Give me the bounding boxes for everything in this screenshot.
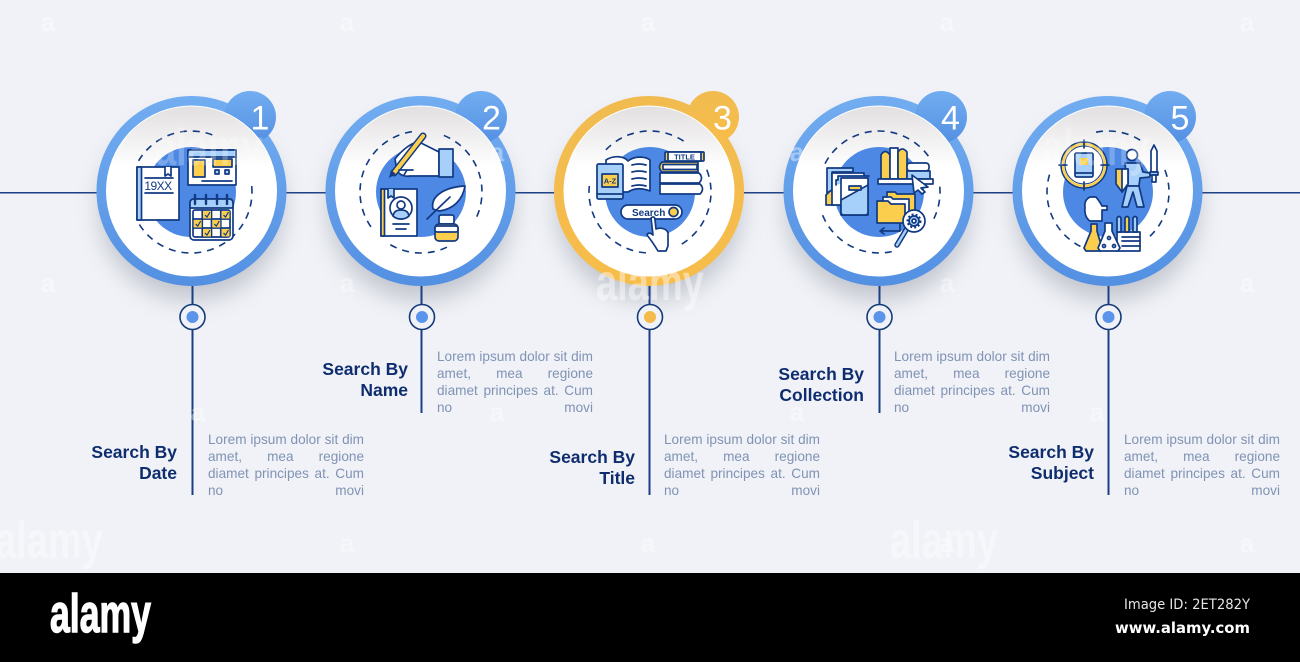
badge 2 xyxy=(455,91,507,143)
icon: ink bottle xyxy=(435,215,458,241)
heading: search by collection: Collection xyxy=(779,385,864,405)
watermarks: a xyxy=(41,268,56,298)
icon: feather xyxy=(427,186,465,219)
watermarks: a xyxy=(1090,397,1105,427)
text block 3: amet, mea regione xyxy=(664,449,820,464)
icon: science flask and test tubes xyxy=(1098,216,1140,251)
marker 2 xyxy=(410,304,434,330)
heading: search by date: Date xyxy=(139,463,177,483)
watermarks: a xyxy=(340,7,355,37)
text block 3 xyxy=(664,430,820,500)
heading: search by subject: Search By xyxy=(1008,442,1094,462)
icon: book stack with title xyxy=(660,152,704,194)
text block 3: Lorem ipsum dolor sit dim xyxy=(664,432,820,446)
website: www.alamy.com xyxy=(1115,619,1250,637)
text block 4: Lorem ipsum dolor sit dim xyxy=(894,348,1050,364)
watermarks: alamy xyxy=(596,254,704,312)
watermarks: alamy xyxy=(155,119,263,177)
panel: step 1 search by date xyxy=(91,91,364,500)
icon: pointing hand xyxy=(647,217,668,251)
badge 5: 5 xyxy=(1171,100,1189,138)
icon: yellow folders xyxy=(877,192,915,234)
text block 2 xyxy=(437,348,593,418)
icon: dated book: 19XX xyxy=(144,179,172,193)
image id: Image ID: 2ET282Y xyxy=(1124,597,1250,613)
icon: catalog card xyxy=(188,150,236,185)
text block 3: diamet principes at. Cum xyxy=(664,466,820,481)
watermarks: a xyxy=(641,528,656,558)
heading: search by date: Search By xyxy=(91,442,177,462)
watermarks: a xyxy=(1240,528,1255,558)
icon: dated book xyxy=(137,167,179,220)
icon: books on shelf xyxy=(878,148,933,184)
icon: profile notebook xyxy=(381,189,417,236)
icon: hand with flask xyxy=(1084,197,1107,251)
panel: step 4 search by collection xyxy=(778,91,1050,418)
watermarks: a xyxy=(191,397,206,427)
badge 3: 3 xyxy=(713,100,732,138)
watermarks: a xyxy=(490,397,505,427)
text block 2: amet, mea regione xyxy=(437,366,593,381)
text block 4: amet, mea regione xyxy=(894,366,1050,381)
text block 4 xyxy=(894,348,1050,418)
text block 1: Lorem ipsum dolor sit dim xyxy=(208,432,364,446)
watermarks: a xyxy=(490,137,505,167)
badge 5 xyxy=(1144,91,1196,143)
badge 1: 1 xyxy=(251,100,269,138)
watermarks: a xyxy=(1240,7,1255,37)
watermarks: a xyxy=(940,528,955,558)
ring 4 xyxy=(784,96,974,286)
badge 2: 2 xyxy=(482,100,501,138)
ring 3 xyxy=(554,96,744,286)
text block 5: amet, mea regione xyxy=(1124,449,1280,464)
watermarks: a xyxy=(940,268,955,298)
panel: step 2 search by name xyxy=(322,91,593,418)
marker 3 xyxy=(638,304,662,330)
marker 1 xyxy=(180,304,205,330)
ring 5 xyxy=(1012,96,1202,286)
watermarks: a xyxy=(340,268,355,298)
panel: step 3 search by title xyxy=(549,91,820,500)
text block 5 xyxy=(1124,430,1280,500)
icon: search bar: Search xyxy=(632,208,665,219)
icon: magnifier with gear xyxy=(897,210,925,245)
icon: calendar xyxy=(190,195,233,240)
text block 4: diamet principes at. Cum xyxy=(894,383,1050,398)
ring 1 xyxy=(96,96,286,286)
heading: search by subject: Subject xyxy=(1031,463,1094,483)
icon: search bar xyxy=(621,205,682,219)
watermarks: a xyxy=(41,7,56,37)
text block 1: amet, mea regione xyxy=(208,449,364,464)
panel: step 5 search by subject xyxy=(1008,91,1280,500)
badge 4 xyxy=(915,91,967,143)
text block 5: Lorem ipsum dolor sit dim xyxy=(1124,432,1280,446)
footer logo: alamy xyxy=(50,584,151,644)
icon: cursor xyxy=(912,175,928,194)
text block 2: diamet principes at. Cum xyxy=(437,383,593,398)
badge 1 xyxy=(224,91,276,143)
text block 2: no movi xyxy=(437,400,593,415)
badge 3 xyxy=(687,91,739,143)
heading: search by title: Title xyxy=(599,468,635,488)
icon: book stack with title: TITLE xyxy=(674,152,695,162)
text block 5: no movi xyxy=(1124,483,1280,498)
ring 2 xyxy=(326,96,516,286)
marker 5 xyxy=(1096,304,1121,330)
icon: book in target xyxy=(1059,140,1109,190)
watermarks: a xyxy=(790,397,805,427)
icon: a-z book: A-Z xyxy=(604,176,617,186)
text block 4: no movi xyxy=(894,400,1050,415)
text block 1 xyxy=(208,430,364,500)
heading: search by name: Search By xyxy=(322,359,408,379)
icon: open book xyxy=(606,157,650,192)
watermarks: a xyxy=(790,137,805,167)
heading: search by name: Name xyxy=(360,380,408,400)
watermarks: a xyxy=(1240,268,1255,298)
icon: filing folders xyxy=(826,168,869,215)
watermarks: alamy xyxy=(1042,119,1150,177)
icon: hand writing with pencil xyxy=(389,136,453,178)
marker 4 xyxy=(867,304,892,330)
text block 5: diamet principes at. Cum xyxy=(1124,466,1280,481)
icon: a-z book xyxy=(597,164,623,199)
badge 4: 4 xyxy=(941,100,960,138)
watermarks: a xyxy=(340,528,355,558)
heading: search by title: Search By xyxy=(549,447,635,467)
footer bar xyxy=(0,573,1300,662)
text block 2: Lorem ipsum dolor sit dim xyxy=(437,348,593,364)
text block 1: no movi xyxy=(208,483,364,498)
text block 1: diamet principes at. Cum xyxy=(208,466,364,481)
text block 3: no movi xyxy=(664,483,820,498)
icon: knight with shield and sword xyxy=(1116,145,1158,207)
watermarks: a xyxy=(940,7,955,37)
heading: search by collection: Search By xyxy=(778,364,864,384)
watermarks: alamy xyxy=(890,512,998,570)
watermarks: a xyxy=(641,7,656,37)
